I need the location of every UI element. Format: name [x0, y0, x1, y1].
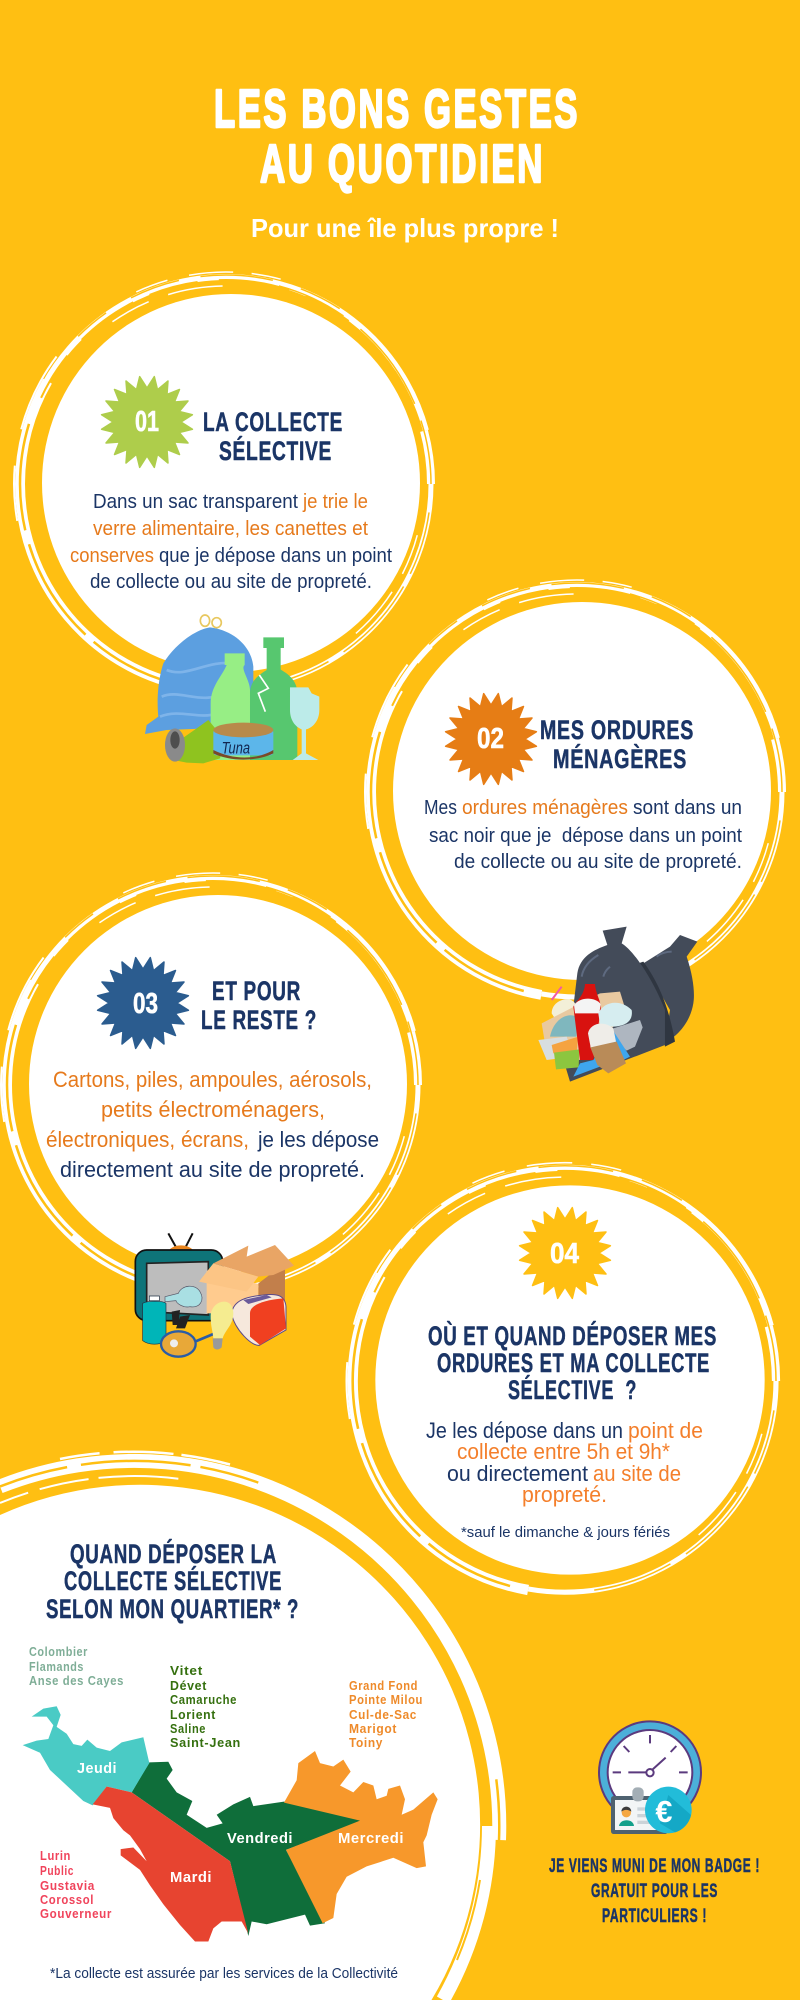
- subtitle: Pour une île plus propre !: [251, 213, 559, 243]
- panel: où et quand déposer: [346, 1163, 783, 1599]
- text 02: sac noir que je dépose dans un point: [429, 825, 742, 847]
- badge 01: [102, 377, 192, 467]
- list: jeudi quartiers: [29, 1644, 124, 1688]
- text 01: [70, 491, 392, 593]
- circle 1: [14, 272, 438, 696]
- list: mercredi quartiers: Cul-de-Sac: [349, 1707, 417, 1722]
- panel: quartier schedule disc: [0, 1452, 499, 2000]
- list: vendredi quartiers: Lorient: [170, 1707, 216, 1722]
- callout: badge: GRATUIT POUR LES: [591, 1881, 718, 1902]
- title: LES BONS GESTES: [214, 79, 580, 139]
- badge 04: 04: [550, 1238, 579, 1270]
- heading: quand déposer: [46, 1538, 299, 1624]
- heading: quand déposer: SELON MON QUARTIER* ?: [46, 1594, 299, 1624]
- map label vendredi: Vendredi: [227, 1830, 293, 1847]
- text 02: [424, 797, 742, 873]
- map label jeudi: Jeudi: [77, 1760, 117, 1777]
- callout: badge: [549, 1856, 760, 1927]
- footnote: collecte: *La collecte est assurée par les services de la Collectivité: [50, 1965, 398, 1982]
- text 01: verre alimentaire, les canettes et: [93, 518, 368, 540]
- map: island by collection day: [23, 1706, 438, 1941]
- heading 03: LE RESTE ?: [201, 1005, 317, 1035]
- icon: clock, badge and euro: €: [655, 1795, 672, 1829]
- text 01: que je dépose dans un point: [159, 545, 392, 567]
- list: mardi quartiers: Corossol: [40, 1892, 94, 1907]
- map zones: [23, 1706, 438, 1941]
- title: [214, 79, 580, 194]
- list: vendredi quartiers: Vitet: [170, 1663, 203, 1678]
- badge 03: 03: [133, 988, 158, 1020]
- heading 02: MES ORDURES: [540, 715, 694, 745]
- map label mardi: Mardi: [170, 1869, 212, 1886]
- text 02: Mes: [424, 797, 457, 819]
- list: mercredi quartiers: Grand Fond: [349, 1678, 418, 1693]
- text 01: de collecte ou au site de propreté.: [90, 571, 372, 593]
- list: mercredi quartiers: Toiny: [349, 1735, 383, 1750]
- callout: badge: PARTICULIERS !: [602, 1906, 707, 1927]
- list: vendredi quartiers: [170, 1663, 241, 1750]
- text 04: Je les dépose dans un: [426, 1418, 623, 1443]
- panel: la collecte sélective: [14, 272, 438, 763]
- list: mercredi quartiers: Pointe Milou: [349, 1692, 423, 1707]
- list: mercredi quartiers: [349, 1678, 423, 1750]
- text 04: propreté.: [522, 1482, 607, 1507]
- icon: tv, box, toaster, bulb, spray, batteries, racket: [135, 1233, 294, 1357]
- heading: quand déposer: COLLECTE SÉLECTIVE: [64, 1565, 282, 1596]
- text 01: Dans un sac transparent: [93, 491, 298, 513]
- heading 01: LA COLLECTE: [203, 407, 343, 437]
- circle 2: [365, 580, 789, 1004]
- list: vendredi quartiers: Saline: [170, 1721, 206, 1736]
- heading: quand déposer: QUAND DÉPOSER LA: [70, 1538, 277, 1569]
- heading 04: [428, 1320, 717, 1405]
- heading 03: [201, 976, 317, 1035]
- circle 4: [346, 1163, 783, 1599]
- heading 02: MÉNAGÈRES: [553, 743, 687, 774]
- panel: mes ordures ménagères: [365, 580, 789, 1082]
- text 03: électroniques, écrans,: [46, 1127, 249, 1152]
- list: jeudi quartiers: Colombier: [29, 1644, 88, 1659]
- text 04: [426, 1418, 703, 1507]
- heading 03: ET POUR: [212, 976, 301, 1006]
- text 04: point de: [628, 1418, 703, 1443]
- icon: bag, bottles, can and tin: [145, 615, 319, 763]
- list: vendredi quartiers: Camaruche: [170, 1692, 237, 1707]
- heading 04: SÉLECTIVE ?: [508, 1374, 637, 1405]
- list: vendredi quartiers: Dévet: [170, 1678, 207, 1693]
- text 01: je trie le: [302, 491, 368, 513]
- text 04: ou directement: [447, 1461, 588, 1486]
- heading 01: SÉLECTIVE: [219, 435, 332, 466]
- panel: et pour le reste: [1, 873, 425, 1357]
- title: AU QUOTIDIEN: [260, 134, 545, 194]
- badge 04: [520, 1208, 610, 1298]
- icon: black bags and waste: [538, 927, 697, 1082]
- badge 02: [446, 694, 536, 784]
- text 02: ordures ménagères: [462, 797, 628, 819]
- text 04: au site de: [593, 1461, 681, 1486]
- icon: clock, badge and euro: [599, 1721, 701, 1834]
- list: jeudi quartiers: Flamands: [29, 1659, 84, 1674]
- text 03: directement au site de propreté.: [60, 1157, 365, 1182]
- list: mardi quartiers: Gouverneur: [40, 1906, 112, 1921]
- list: jeudi quartiers: Anse des Cayes: [29, 1673, 124, 1688]
- text 02: sont dans un: [633, 797, 742, 819]
- text 03: je les dépose: [257, 1127, 379, 1152]
- list: mardi quartiers: Gustavia: [40, 1878, 95, 1893]
- icon: bag, bottles, can and tin: Tuna: [222, 738, 250, 757]
- heading 01: [203, 407, 343, 466]
- heading 02: [540, 715, 694, 774]
- text 01: conserves: [70, 545, 154, 567]
- badge 01: 01: [135, 406, 159, 438]
- list: mardi quartiers: Public: [40, 1863, 74, 1878]
- text 03: petits électroménagers,: [101, 1097, 325, 1122]
- text 03: Cartons, piles, ampoules, aérosols,: [53, 1067, 372, 1092]
- list: mardi quartiers: [40, 1848, 112, 1921]
- text 04: collecte entre 5h et 9h*: [457, 1439, 670, 1464]
- text 03: [46, 1067, 379, 1182]
- badge 03: [98, 958, 188, 1048]
- badge 02: 02: [477, 723, 504, 755]
- list: mercredi quartiers: Marigot: [349, 1721, 397, 1736]
- list: vendredi quartiers: Saint-Jean: [170, 1735, 241, 1750]
- list: mardi quartiers: Lurin: [40, 1848, 71, 1863]
- map label mercredi: Mercredi: [338, 1830, 404, 1847]
- circle 3: [1, 873, 425, 1297]
- text 02: de collecte ou au site de propreté.: [454, 851, 742, 873]
- footnote 04: *sauf le dimanche & jours fériés: [461, 1524, 670, 1541]
